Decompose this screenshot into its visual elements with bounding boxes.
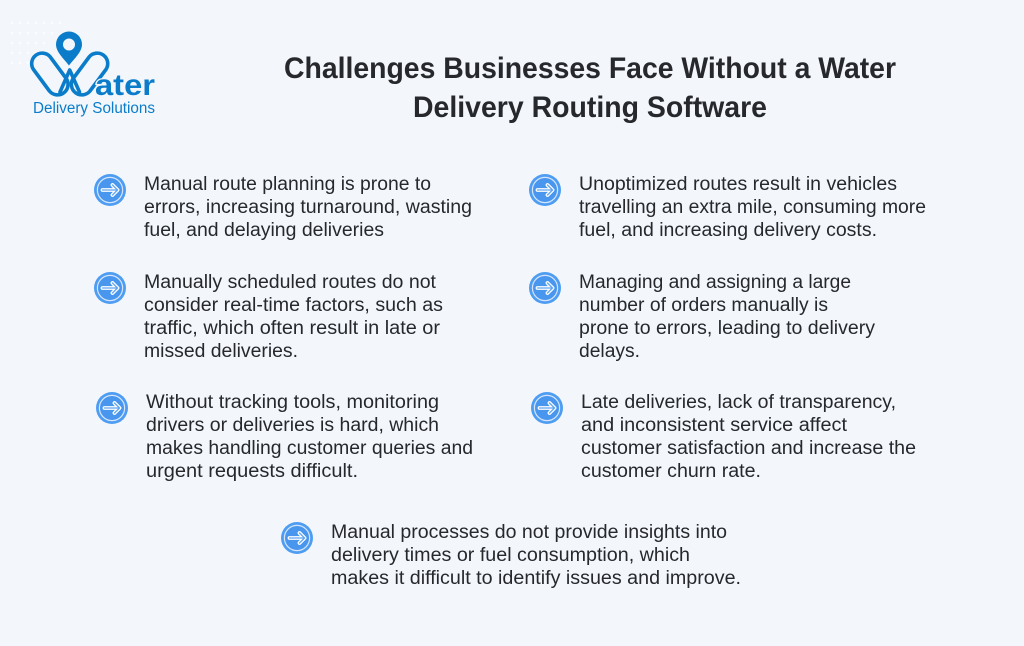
logo: Water Delivery Solutions: Delivery Solutions xyxy=(33,100,155,117)
text: manually scheduled routes: consider real-time factors, such as xyxy=(144,295,443,316)
text: managing and assigning orders: Managing and assigning a large xyxy=(579,272,851,293)
logo: Water Delivery Solutions: ater xyxy=(95,69,155,102)
text: manual processes xyxy=(331,522,741,589)
title xyxy=(284,52,896,124)
text: manual route planning: errors, increasing turnaround, wasting xyxy=(144,197,472,218)
icon: arrow bullet, tracking tools xyxy=(96,392,128,424)
icon: arrow bullet, scheduled routes xyxy=(94,272,126,304)
text: manual route planning xyxy=(144,174,472,241)
text: late deliveries xyxy=(581,392,916,482)
text: late deliveries: Late deliveries, lack of transparency, xyxy=(581,392,896,413)
text: late deliveries: and inconsistent service affect xyxy=(581,415,848,436)
text: manually scheduled routes: Manually scheduled routes do not xyxy=(144,272,437,293)
text: unoptimized routes: travelling an extra mile, consuming more xyxy=(579,197,926,218)
text: without tracking tools: Without tracking tools, monitoring xyxy=(146,392,439,413)
title: Challenges Businesses Face Without a Water xyxy=(284,52,896,85)
text: without tracking tools: drivers or deliveries is hard, which xyxy=(146,415,439,436)
text: managing and assigning orders: delays. xyxy=(579,341,640,362)
text: manual processes: Manual processes do not provide insights into xyxy=(331,522,727,543)
icon: arrow bullet, manual processes xyxy=(281,522,313,554)
text: manually scheduled routes: traffic, which often result in late or xyxy=(144,318,441,339)
text: manual route planning: fuel, and delaying deliveries xyxy=(144,220,384,241)
icon: arrow bullet, unoptimized routes xyxy=(529,174,561,206)
text: manual processes: makes it difficult to identify issues and improve. xyxy=(331,568,741,589)
text: late deliveries: customer churn rate. xyxy=(581,461,761,482)
text: unoptimized routes xyxy=(579,174,926,241)
title: Delivery Routing Software xyxy=(413,91,767,124)
text: without tracking tools: makes handling customer queries and xyxy=(146,438,473,459)
text: unoptimized routes: Unoptimized routes result in vehicles xyxy=(579,174,897,195)
text: manually scheduled routes: missed deliveries. xyxy=(144,341,298,362)
text: managing and assigning orders xyxy=(579,272,876,362)
icon: arrow bullet, assigning orders xyxy=(529,272,561,304)
text: manually scheduled routes xyxy=(144,272,443,362)
text: unoptimized routes: fuel, and increasing delivery costs. xyxy=(579,220,877,241)
icon: arrow bullet, route planning xyxy=(94,174,126,206)
text: manual processes: delivery times or fuel consumption, which xyxy=(331,545,690,566)
icon: arrow bullet, late deliveries xyxy=(531,392,563,424)
logo: Water Delivery Solutions xyxy=(11,22,155,117)
text: managing and assigning orders: prone to errors, leading to delivery xyxy=(579,318,876,339)
text: manual route planning: Manual route planning is prone to xyxy=(144,174,431,195)
text: without tracking tools: urgent requests difficult. xyxy=(146,461,358,482)
text: without tracking tools xyxy=(146,392,473,482)
text: late deliveries: customer satisfaction and increase the xyxy=(581,438,916,459)
text: managing and assigning orders: number of orders manually is xyxy=(579,295,828,316)
